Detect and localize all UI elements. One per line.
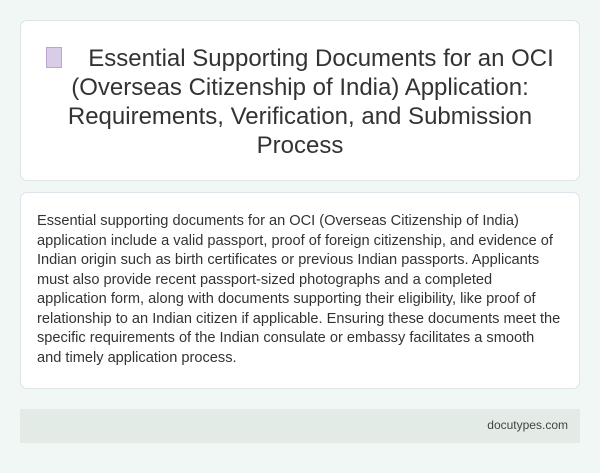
- footer: docutypes.com: [487, 418, 568, 432]
- footer: [20, 409, 580, 443]
- text block: and timely application process.: [37, 350, 237, 366]
- text block: relationship to an Indian citizen if applicable. Ensuring these documents meet the: [37, 310, 560, 326]
- icon: document: [46, 47, 62, 68]
- text block: Indian origin such as birth certificates or previous Indian passports. Applicants: [37, 252, 539, 268]
- text block: application form, along with documents supporting their eligibility, like proof of: [37, 291, 536, 307]
- text block: application include a valid passport, proof of foreign citizenship, and evidence of: [37, 232, 553, 248]
- panel: description: [20, 192, 580, 389]
- text block: specific requirements of the Indian consulate or embassy facilitates a smooth: [37, 330, 534, 346]
- text block: [37, 213, 560, 366]
- text block: Essential supporting documents for an OCI (Overseas Citizenship of India): [37, 213, 519, 229]
- title: Essential Supporting Documents for an OCI (Overseas Citizenship of India) Application: Requirements, Verification, and Submission Process: [68, 45, 554, 159]
- panel: title: [20, 20, 580, 181]
- text block: must also provide recent passport-sized photographs and a completed: [37, 272, 492, 288]
